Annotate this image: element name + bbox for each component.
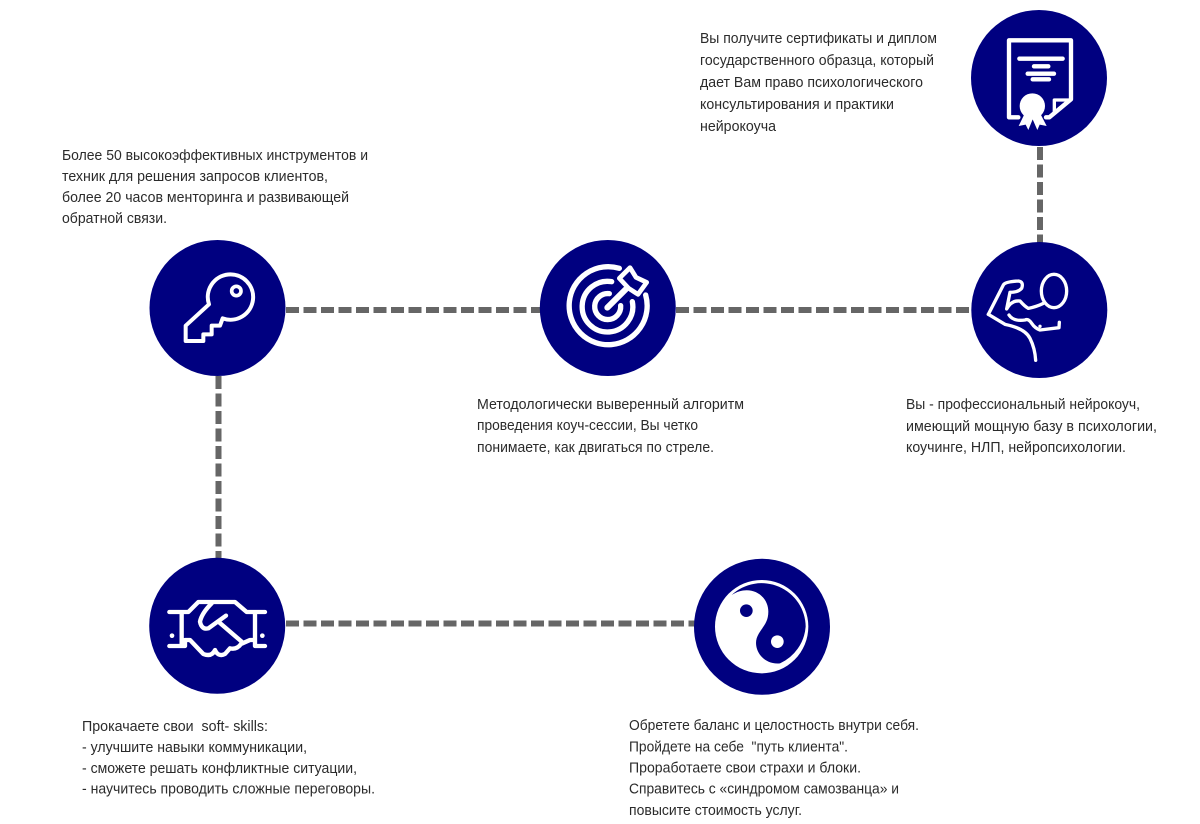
text: certificate description: нейрокоуча — [700, 119, 777, 135]
text: balance description: Обретете баланс и целостность внутри себя. — [629, 718, 919, 734]
text: tools description: более 20 часов менторинга и развивающей — [62, 190, 349, 206]
text: soft skills list — [82, 719, 375, 798]
text: balance description: Справитесь с «синдромом самозванца» и — [629, 782, 899, 798]
connector: muscle to certificate — [1037, 147, 1043, 244]
text: soft skills list: - улучшите навыки коммуникации, — [82, 740, 307, 756]
text: professional description: Вы - профессиональный нейрокоуч, — [906, 397, 1140, 413]
text: certificate description — [700, 31, 937, 135]
text: professional description — [906, 397, 1157, 456]
text: balance description — [629, 718, 919, 819]
icon: handshake — [169, 602, 265, 655]
text: balance description: Пройдете на себе "путь клиента". — [629, 740, 848, 756]
node: muscle — [971, 242, 1107, 378]
node: target — [540, 240, 676, 376]
text: certificate description: государственного образца, который — [700, 53, 934, 69]
connector: key to handshake — [216, 376, 222, 558]
icon: target with arrow — [569, 267, 647, 345]
text: algorithm description: проведения коуч-сессии, Вы четко — [477, 418, 698, 434]
text: professional description: имеющий мощную базу в психологии, — [906, 419, 1157, 435]
text: soft skills list: - научитесь проводить сложные переговоры. — [82, 782, 375, 798]
connector: handshake to yin-yang — [286, 620, 695, 626]
connector: target to muscle — [676, 307, 972, 313]
node: handshake — [149, 558, 285, 694]
text: professional description: коучинге, НЛП, нейропсихологии. — [906, 440, 1126, 456]
text: certificate description: дает Вам право психологического — [700, 75, 923, 91]
text: algorithm description: понимаете, как двигаться по стреле. — [477, 440, 714, 456]
connector: key to target — [286, 307, 540, 313]
text: tools description: обратной связи. — [62, 211, 167, 227]
node: yin-yang — [694, 559, 830, 695]
text: balance description: повысите стоимость услуг. — [629, 803, 802, 819]
icon: key — [186, 274, 253, 341]
icon: yin-yang — [715, 580, 808, 673]
node: key — [150, 240, 286, 376]
icon: certificate — [1009, 40, 1071, 130]
text: tools description: техник для решения запросов клиентов, — [62, 169, 328, 185]
text: soft skills list: - сможете решать конфликтные ситуации, — [82, 761, 357, 777]
text: certificate description: консультирования и практики — [700, 97, 894, 113]
text: tools description: Более 50 высокоэффективных инструментов и — [62, 148, 368, 164]
text: algorithm description: Методологически выверенный алгоритм — [477, 397, 744, 413]
text: tools description — [62, 148, 368, 227]
text: certificate description: Вы получите сертификаты и диплом — [700, 31, 937, 47]
node: certificate — [971, 10, 1107, 146]
text: balance description: Проработаете свои страхи и блоки. — [629, 760, 861, 776]
text: algorithm description — [477, 397, 744, 456]
text: soft skills list: Прокачаете свои soft- skills: — [82, 719, 268, 735]
icon: flexed arm — [988, 274, 1067, 360]
